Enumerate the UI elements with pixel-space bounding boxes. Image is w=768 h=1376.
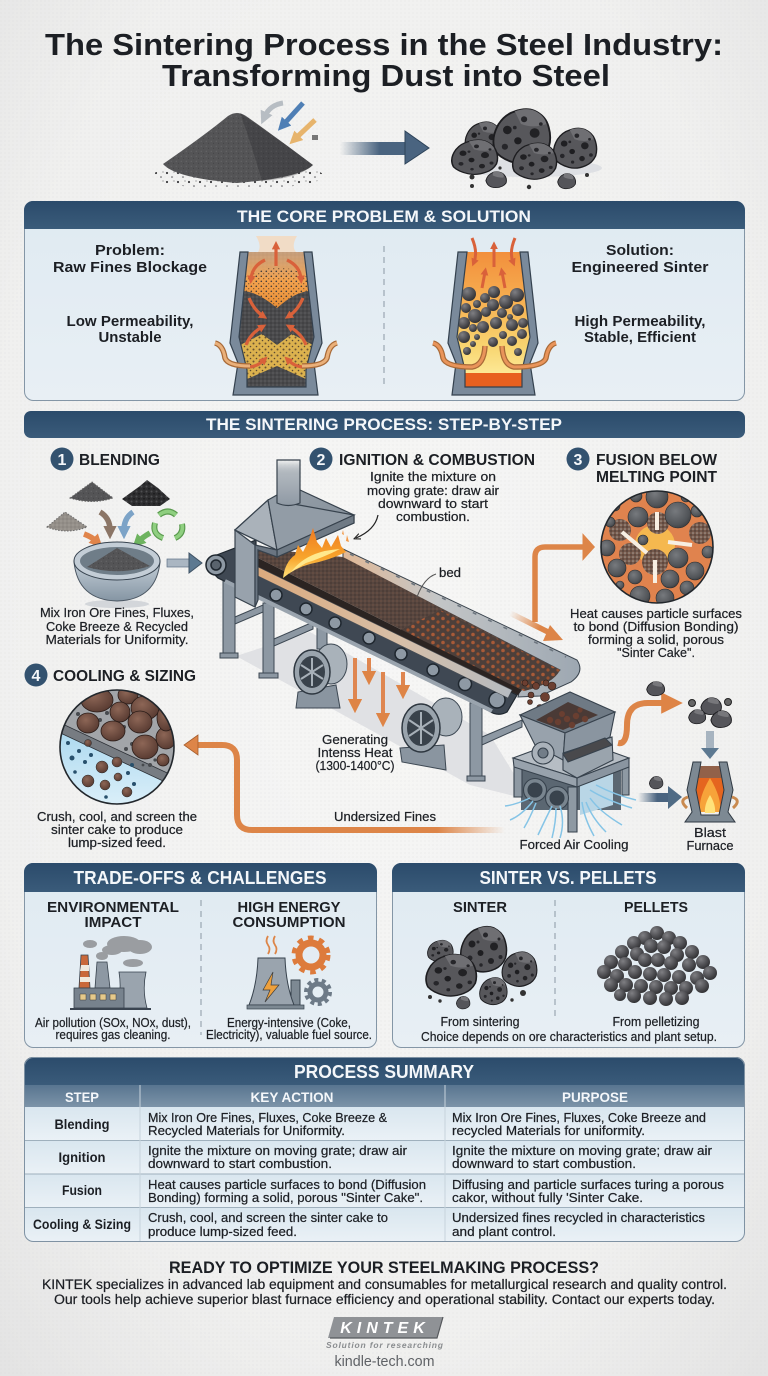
table title: PROCESS SUMMARY <box>294 1062 474 1082</box>
key action column: downward to start combustion. <box>148 1157 332 1171</box>
step 1 heading: BLENDING <box>79 452 160 469</box>
conveyor frame <box>210 540 517 714</box>
step column <box>33 1117 131 1232</box>
step 2 text <box>367 470 499 524</box>
comparison note: Choice depends on ore characteristics and plant setup. <box>421 1030 717 1044</box>
step 3 text: Heat causes particle surfaces <box>570 607 742 621</box>
title <box>45 27 723 93</box>
icon: sinter lumps <box>426 927 537 1009</box>
call to action: Our tools help achieve superior blast furnace efficiency and operational stability. Contact our experts today. <box>54 1292 715 1307</box>
column headers <box>65 1089 628 1105</box>
problem text <box>53 242 207 346</box>
step 3 heading: MELTING POINT <box>596 469 717 486</box>
key action column: Mix Iron Ore Fines, Fluxes, Coke Breeze & <box>148 1111 388 1125</box>
step 2 text: moving grate: draw air <box>367 484 499 498</box>
purpose column: Ignite the mixture on moving grate; draw air <box>452 1144 712 1158</box>
panel: core problem and solution <box>24 201 745 400</box>
energy text: Electricity), valuable fuel source. <box>206 1028 372 1042</box>
purpose column: Diffusing and particle surfaces turing a porous <box>452 1178 724 1192</box>
column headers: STEP <box>65 1089 99 1105</box>
energy heading: HIGH ENERGY <box>238 899 340 916</box>
heading text: SINTER VS. PELLETS <box>480 868 656 888</box>
panel: sinter vs pellets <box>392 863 745 1048</box>
icon: blast furnace <box>683 762 737 822</box>
step column: Fusion <box>62 1183 102 1198</box>
key action column: Ignite the mixture on moving grate; draw air <box>148 1144 407 1158</box>
heading: core problem <box>24 201 745 229</box>
purpose column: and plant control. <box>452 1225 556 1239</box>
panel: trade-offs and challenges <box>24 863 377 1048</box>
heading text: TRADE-OFFS & CHALLENGES <box>74 868 326 888</box>
key action column: produce lump-sized feed. <box>148 1225 297 1239</box>
step column: Ignition <box>58 1150 106 1165</box>
solution text: High Permeability, <box>574 314 706 330</box>
heading: step-by-step bar: THE SINTERING PROCESS: STEP-BY-STEP <box>206 416 562 434</box>
website: kindle-tech.com <box>334 1354 434 1370</box>
heat label <box>316 733 394 773</box>
floor shadow <box>236 632 530 800</box>
step 4 text <box>37 810 197 850</box>
icon: energy consumption <box>247 936 330 1009</box>
environmental text <box>35 1016 191 1042</box>
column headers: PURPOSE <box>562 1089 628 1105</box>
purpose column: downward to start combustion. <box>452 1157 636 1171</box>
icon: sinter lumps <box>452 109 602 189</box>
step 1 text: Coke Breeze & Recycled <box>46 620 188 634</box>
environmental heading: IMPACT <box>84 914 142 931</box>
energy text <box>206 1016 372 1042</box>
pellets caption: From pelletizing <box>612 1015 700 1029</box>
key action column <box>148 1111 426 1239</box>
step 3 text: to bond (Diffusion Bonding) <box>574 620 738 634</box>
call to action: READY TO OPTIMIZE YOUR STEELMAKING PROCESS? <box>169 1259 599 1277</box>
step 4 heading: 4 <box>32 668 41 685</box>
column headers: KEY ACTION <box>250 1089 334 1105</box>
logo: KINTEK: KINTEK <box>340 1320 430 1337</box>
step 4 heading <box>24 664 196 686</box>
heading bar <box>24 863 377 892</box>
step 3 heading <box>566 448 718 486</box>
falling sinter <box>522 680 566 712</box>
purpose column: Undersized fines recycled in characteristics <box>452 1211 705 1225</box>
step 2 text: combustion. <box>396 510 470 524</box>
step 2 text: downward to start <box>378 497 489 511</box>
icon: small lump <box>649 776 663 789</box>
purpose column: cakor, without fully 'Sinter Cake. <box>452 1191 643 1205</box>
arrow: heat to fusion <box>510 537 593 641</box>
table title bar <box>24 1057 745 1085</box>
step 1 heading <box>50 448 160 470</box>
arrow: lumps to furnace <box>701 731 719 759</box>
callout arrow to flame <box>356 515 378 538</box>
fines label: Undersized Fines <box>334 810 436 824</box>
cooling air <box>505 785 636 838</box>
solution text: Engineered Sinter <box>572 259 709 276</box>
step 2 heading: 2 <box>317 452 326 469</box>
logo: KINTEK: Solution for researching <box>326 1340 444 1350</box>
arrow: dust to sinter <box>340 131 429 164</box>
purpose column: Mix Iron Ore Fines, Fluxes, Coke Breeze and <box>452 1111 706 1125</box>
sinter caption: From sintering <box>440 1015 520 1029</box>
step 4 text: lump-sized feed. <box>68 836 166 850</box>
heading bar <box>392 863 745 892</box>
fan 1 <box>294 644 347 708</box>
illustration: sintering machine <box>206 460 636 838</box>
key action column: Recycled Materials for Uniformity. <box>148 1124 345 1138</box>
icon: permeable furnace <box>433 238 556 395</box>
step 3 text: forming a solid, porous <box>588 633 724 647</box>
arrow: undersized fines return <box>184 735 505 830</box>
flames <box>283 528 349 578</box>
energy text: Energy-intensive (Coke, <box>227 1016 351 1030</box>
title: Transforming Dust into Steel <box>162 58 610 93</box>
sinter label: SINTER <box>453 899 507 916</box>
step 3 heading: 3 <box>574 452 583 469</box>
step 1 text <box>40 606 194 647</box>
step 4 text: Crush, cool, and screen the <box>37 810 197 824</box>
bed label: bed <box>439 566 461 580</box>
title: The Sintering Process in the Steel Industry: <box>45 27 723 62</box>
blast furnace label: Furnace <box>686 839 734 853</box>
heading: step-by-step bar <box>24 411 745 438</box>
fan 2 <box>400 698 462 770</box>
step 2 heading <box>310 448 535 470</box>
problem text: Raw Fines Blockage <box>53 259 207 276</box>
solution text <box>572 242 709 346</box>
step 1 heading: 1 <box>58 452 67 469</box>
environmental text: Air pollution (SOx, NOx, dust), <box>35 1016 191 1030</box>
cooling label: Forced Air Cooling <box>520 838 628 852</box>
key action column: Bonding) forming a solid, porous "Sinter Cake". <box>148 1191 423 1205</box>
logo: KINTEK <box>326 1317 444 1350</box>
key action column: Crush, cool, and screen the sinter cake to <box>148 1211 388 1225</box>
heat label: Generating <box>322 733 388 747</box>
panel: process summary table <box>24 1057 745 1242</box>
step column: Cooling & Sizing <box>33 1217 131 1232</box>
step column: Blending <box>54 1117 110 1132</box>
problem text: Unstable <box>98 330 162 346</box>
icon: product lumps <box>647 682 732 728</box>
key action column: Heat causes particle surfaces to bond (Diffusion <box>148 1178 426 1192</box>
step 3 text: "Sinter Cake". <box>617 646 695 660</box>
step 4 text: sinter cake to produce <box>51 823 183 837</box>
heat arrows <box>355 658 403 720</box>
conveyor legs <box>220 580 522 781</box>
step 1 icon: material piles and bowl <box>47 480 182 608</box>
problem text: Low Permeability, <box>66 314 194 330</box>
environmental text: requires gas cleaning. <box>56 1028 170 1042</box>
pellets label: PELLETS <box>624 899 688 916</box>
step 2 heading: IGNITION & COMBUSTION <box>339 452 535 469</box>
environmental heading <box>47 899 179 931</box>
icon: input material arrows <box>265 103 318 140</box>
environmental heading: ENVIRONMENTAL <box>47 899 179 916</box>
step 4 icon: screen <box>60 690 174 804</box>
step 4 icon outline <box>60 690 174 804</box>
heat label: (1300-1400°C) <box>316 759 394 773</box>
call to action: KINTEK specializes in advanced lab equipment and consumables for metallurgical research and quality control. <box>42 1277 727 1292</box>
step 2 text: Ignite the mixture on <box>370 470 496 484</box>
solution text: Stable, Efficient <box>584 330 696 346</box>
step 3 heading: FUSION BELOW <box>596 452 718 469</box>
step 1 text: Mix Iron Ore Fines, Fluxes, <box>40 606 194 620</box>
step 3 text <box>570 607 742 660</box>
call to action <box>42 1259 727 1307</box>
step 1 text: Materials for Uniformity. <box>46 633 188 647</box>
solution text: Solution: <box>606 242 674 259</box>
icon: factory pollution <box>70 936 152 1010</box>
icon: raw fines pile <box>152 113 324 189</box>
arrow: product to lumps <box>618 703 672 743</box>
energy heading <box>232 899 346 931</box>
icon: blocked furnace <box>215 236 337 395</box>
arrow: blending to conveyor <box>167 553 202 573</box>
step 3 icon outline <box>601 491 713 603</box>
bed label <box>417 566 461 597</box>
heat label: Intenss Heat <box>318 746 393 760</box>
heading text: THE CORE PROBLEM & SOLUTION <box>237 207 531 226</box>
sinter bed <box>256 548 580 698</box>
crusher and cooler <box>513 692 629 832</box>
icon: pellets <box>597 926 717 1006</box>
problem text: Problem: <box>95 242 165 259</box>
blast furnace label <box>686 826 734 853</box>
blast furnace label: Blast <box>694 826 727 840</box>
step 3 icon: particle fusion <box>602 492 712 602</box>
arrow: cooled to furnace <box>638 786 682 809</box>
energy heading: CONSUMPTION <box>232 914 346 931</box>
step 4 heading: COOLING & SIZING <box>53 668 196 685</box>
hood <box>235 460 354 607</box>
purpose column <box>452 1111 724 1239</box>
purpose column: recycled Materials for uniformity. <box>452 1124 645 1138</box>
rollers <box>206 555 505 708</box>
